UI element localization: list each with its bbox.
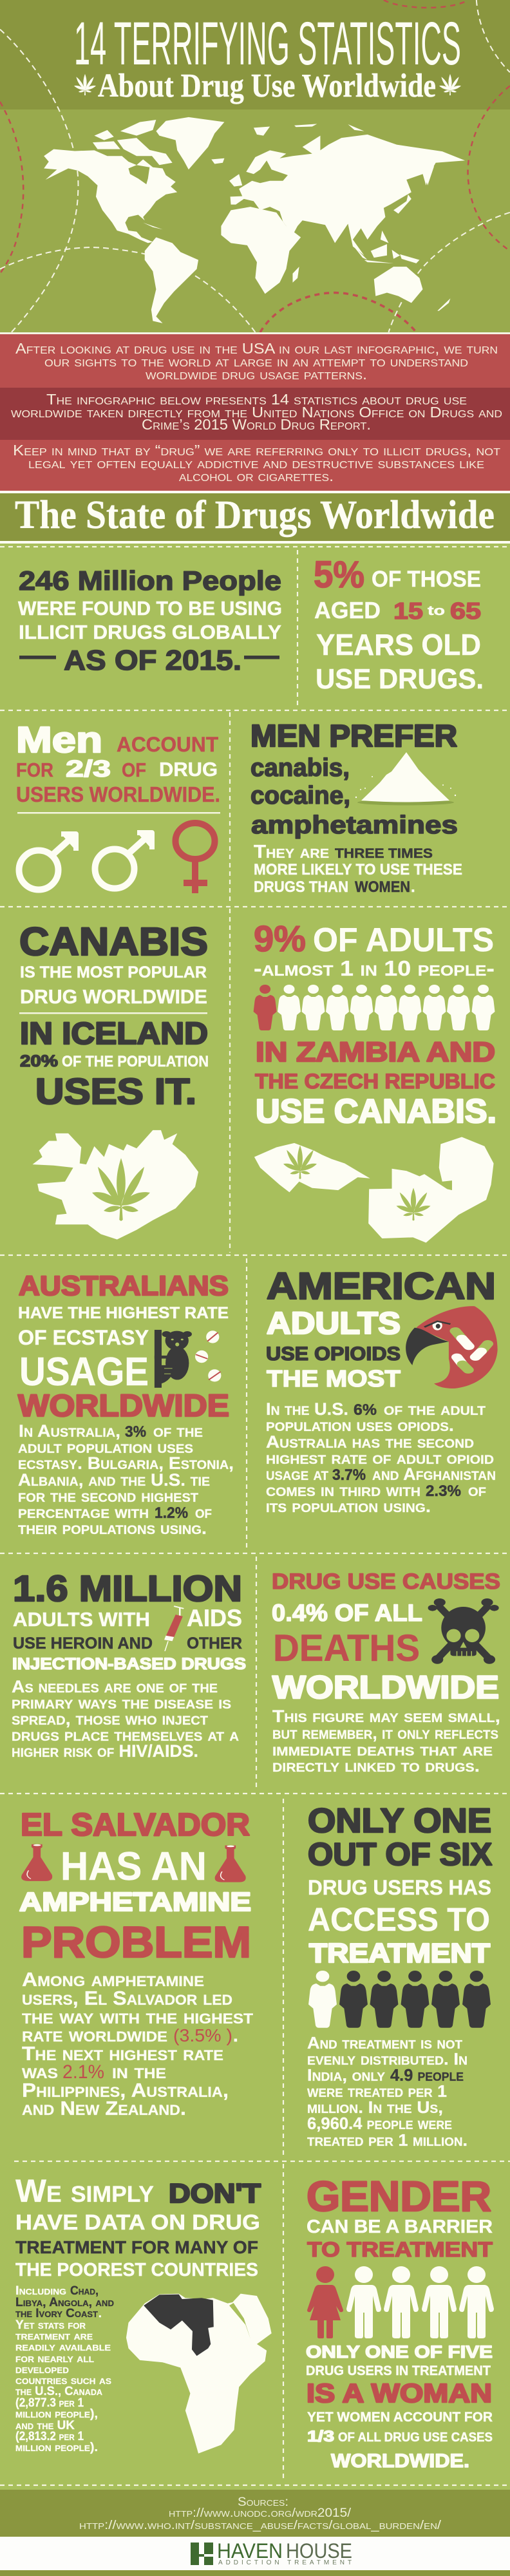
panel: 9 percent in Zambia and Czech Republic: THE CZECH REPUBLIC [255,1070,495,1093]
map: Zambia with leaf [368,1137,494,1243]
panel: 9 percent in Zambia and Czech Republic: USE CANABIS. [256,1093,496,1130]
panel: canabis in Iceland: OF THE POPULATION [62,1053,209,1070]
text: U.S. opioid detail: of [468,1481,486,1500]
panel: only one out of six has access to treatment: TREATMENT [309,1938,490,1968]
panel: gender can be a barrier: CAN BE A BARRIER [307,2217,493,2237]
panel: men prefer canabis, cocaine, amphetamines [250,719,462,896]
text: needles and HIV/AIDS risk [12,1677,239,1761]
text: amphetamine rates: and New Zealand. [22,2097,186,2119]
icon: koala on a pole with pills [155,1330,221,1388]
text: treatment distribution: 4.9 people [390,2065,464,2085]
panel: drug use causes 0.4 percent of deaths: DRUG USE CAUSES [272,1569,500,1594]
icon: female symbol [175,823,215,893]
intro paragraph 3: alcohol or cigarettes. [179,468,334,484]
text: U.S. opioid detail: comes in third with [266,1481,420,1500]
panel: American adults use opioids: ADULTS [267,1307,401,1341]
panel: 5 percent of those aged 15 to 65: AGED [314,597,381,623]
text: needles and HIV/AIDS risk: As needles are one of the [12,1677,218,1696]
panel: gender can be a barrier: DRUG USERS IN TREATMENT [306,2363,491,2378]
panel: American adults use opioids: AMERICAN [267,1265,496,1307]
text: treatment distribution: India, only [307,2065,385,2085]
panel: 5 percent of those aged 15 to 65: 15 [393,598,423,624]
header: title band and world map [0,0,510,332]
icon: skull and crossbones [428,1598,499,1664]
panel: 9 percent in Zambia and Czech Republic [254,918,496,1243]
panel: American adults use opioids: THE MOST [267,1365,401,1392]
text: figure may seem small: immediate deaths that are [272,1740,493,1759]
panel: no data on treatment in poorest countries [15,2173,272,2454]
text: countries list: treatment are [15,2329,93,2343]
panel: only one out of six has access to treatment [307,1802,492,2150]
panel: 246 million people: AS OF 2015. [64,645,241,676]
text: countries list: the U.S., Canada [15,2385,103,2398]
panel: no data on treatment in poorest countries: THE POOREST COUNTRIES [15,2260,258,2280]
panel: gender can be a barrier: GENDER [307,2172,491,2220]
panel: men prefer canabis, cocaine, amphetamines: . [411,878,415,896]
panel: men prefer canabis, cocaine, amphetamines: amphetamines [251,811,458,839]
panel: 1.6 million adults with AIDS: ADULTS WITH [13,1608,150,1631]
panel: canabis in Iceland: USES IT. [35,1071,196,1112]
panel: men prefer canabis, cocaine, amphetamines: They are [254,842,329,862]
text: Australia ecstasy detail: 3% [125,1423,146,1441]
icon: eagle head with pills [406,1306,498,1388]
text: U.S. opioid detail: Australia has the second [266,1432,474,1452]
panel: 246 million people: WERE FOUND TO BE USING [18,597,282,620]
intro paragraph 2: Crime’s 2015 World Drug Report. [142,416,371,433]
intro text panel [0,332,510,491]
text: treatment distribution [307,2033,468,2150]
icon: flasks [21,1844,246,1882]
text: amphetamine rates: users, El Salvador led [22,1987,232,2009]
panel: El Salvador amphetamine problem: EL SALVADOR [21,1808,250,1842]
panel: no data on treatment in poorest countries: HAVE DATA ON DRUG [15,2210,260,2234]
panel: drug use causes 0.4 percent of deaths [272,1569,500,1776]
panel: American adults use opioids: USE OPIOIDS [266,1343,401,1365]
panel: American adults use opioids [266,1265,498,1516]
panel: gender can be a barrier: WORLDWIDE. [331,2450,469,2472]
text: Australia ecstasy detail: ecstasy. Bulgaria, Estonia, [18,1454,234,1473]
text: Australia ecstasy detail: In Australia, [19,1421,120,1441]
panel: 246 million people: 246 Million People [19,565,281,596]
footer: Haven House logo: ADDICTION TREATMENT [218,2559,352,2566]
panel: no data on treatment in poorest countries: DON'T [169,2178,261,2208]
text: U.S. opioid detail: and Afghanistan [372,1464,496,1484]
map: Czech Republic with leaf [254,1143,370,1192]
panel: Australians ecstasy usage: OF ECSTASY [18,1326,149,1349]
panel: drug use causes 0.4 percent of deaths: WORLDWIDE [272,1669,499,1705]
text: amphetamine rates: Among amphetamine [22,1968,204,1991]
panel: men prefer canabis, cocaine, amphetamines: cocaine, [250,782,350,810]
text: countries list: (2,813.2 per 1 [15,2430,84,2443]
panel: 1.6 million adults with AIDS [12,1568,246,1761]
text: figure may seem small: This figure may seem small, [272,1707,500,1726]
panel: Australians ecstasy usage: USAGE [19,1350,149,1394]
text: treatment distribution: million. In the Us, [307,2098,443,2117]
text: countries list: Libya, Angola, and [15,2296,114,2309]
text: needles and HIV/AIDS risk: higher risk of HIV/AIDS. [12,1741,198,1761]
text: U.S. opioid detail: of the adult [384,1399,486,1419]
panel: El Salvador amphetamine problem: PROBLEM [21,1918,251,1967]
panel: gender can be a barrier: OF ALL DRUG USE CASES [338,2430,493,2445]
panel: men prefer canabis, cocaine, amphetamines: canabis, [250,754,350,782]
panel: men account for 2/3 of drug users: ACCOUNT [117,733,218,756]
panel: 5 percent of those aged 15 to 65: OF THOSE [372,567,481,592]
text: Australia ecstasy detail: of the [153,1421,203,1441]
panel: gender can be a barrier [306,2172,494,2472]
panel: 1.6 million adults with AIDS: AIDS [187,1605,242,1631]
map: Iceland with leaf [32,1130,198,1240]
icon: pills [195,1331,221,1382]
intro paragraph 1 [15,340,498,383]
sources band: http://www.who.int/substance_abuse/facts/global_burden/en/ [79,2519,442,2532]
logo mark [191,2543,213,2565]
text: U.S. opioid detail: 3.7% [332,1466,366,1484]
panel: men account for 2/3 of drug users: USERS WORLDWIDE. [16,782,220,806]
intro paragraph 2: worldwide taken directly from the United Nations Office on Drugs and [11,404,502,421]
text: U.S. opioid detail: 2.3% [426,1482,461,1500]
panel: 5 percent of those aged 15 to 65: 65 [450,598,481,624]
text: U.S. opioid detail: highest rate of adult opioid [266,1448,494,1468]
text: amphetamine rates: was [22,2060,58,2083]
panel: Australians ecstasy usage: WORLDWIDE [18,1389,229,1423]
panel: only one out of six has access to treatment: ONLY ONE [308,1802,491,1840]
text: countries list: and the UK [15,2419,75,2432]
panel: 5 percent of those aged 15 to 65 [314,554,484,695]
panel: men prefer canabis, cocaine, amphetamines: MORE LIKELY TO USE THESE [254,861,462,878]
text: countries list: Yet stats for [15,2318,86,2332]
panel: gender can be a barrier: IS A WOMAN [307,2378,492,2408]
text: countries list: Including [15,2284,66,2298]
text: amphetamine rates: the way with the highest [22,2005,254,2028]
icon: syringe [164,1606,184,1651]
text: countries list: readily available [15,2340,111,2354]
text: Australia ecstasy detail: Albania, and the U.S. tie [18,1470,210,1490]
panel: no data on treatment in poorest countries: TREATMENT FOR MANY OF [15,2237,258,2257]
panel: no data on treatment in poorest countries: We simply [15,2173,154,2209]
panel: only one out of six has access to treatment: OUT OF SIX [308,1837,492,1872]
panel: canabis in Iceland: 20% [20,1052,58,1070]
panel: 5 percent of those aged 15 to 65: 5% [314,554,364,596]
text: treatment distribution: treated per 1 million. [307,2130,468,2150]
panel: men prefer canabis, cocaine, amphetamines: THREE TIMES [335,846,433,861]
panel: only one out of six has access to treatment: DRUG USERS HAS [308,1876,491,1899]
icon row: 1 in 10 people [254,985,495,1030]
panel: men prefer canabis, cocaine, amphetamines: DRUGS THAN [254,878,348,896]
intro paragraph 1: worldwide drug usage patterns. [146,366,367,383]
text: Australia ecstasy detail: their populations using. [18,1519,207,1538]
panel: 9 percent in Zambia and Czech Republic: -almost 1 in 10 people- [254,956,495,980]
panel: 9 percent in Zambia and Czech Republic: IN ZAMBIA AND [256,1037,495,1068]
text: needles and HIV/AIDS risk: primary ways the disease is [12,1693,231,1712]
text: amphetamine rates [22,1968,254,2119]
text: countries list: . [99,2307,102,2320]
intro paragraph 3 [13,442,500,484]
text: amphetamine rates: . [233,2025,238,2045]
panel: El Salvador amphetamine problem: HAS AN [61,1844,207,1889]
text: Australia ecstasy detail: of [195,1502,212,1522]
panel: drug use causes 0.4 percent of deaths: 0.4% OF ALL [272,1600,422,1626]
panel: 5 percent of those aged 15 to 65: USE DRUGS. [316,663,484,695]
panel: men prefer canabis, cocaine, amphetamines: WOMEN [355,878,410,896]
text: countries list: million people), [15,2407,98,2421]
icon: male symbol [95,833,152,889]
panel: canabis in Iceland: IN ICELAND [20,1017,208,1051]
text: amphetamine rates: in the [112,2060,166,2083]
intro paragraph 1: After looking at drug use in the USA in our last infographic, we turn [15,340,498,357]
text: amphetamine rates: Philippines, Australia, [22,2079,229,2101]
text: needles and HIV/AIDS risk: drugs place themselves at a [12,1725,239,1745]
text: U.S. opioid detail: In the U.S. [266,1399,348,1419]
text: countries list: (2,877.3 per 1 [15,2396,84,2410]
panel: 1.6 million adults with AIDS: INJECTION-BASED DRUGS [12,1655,246,1673]
text: Australia ecstasy detail [18,1421,234,1538]
text: Australia ecstasy detail: percentage with [18,1502,149,1522]
panel: 5 percent of those aged 15 to 65: to [428,604,445,618]
text: U.S. opioid detail: usage at [266,1464,328,1484]
intro paragraph 2: The infographic below presents 14 statistics about drug use [46,391,467,408]
text: countries list: developed [15,2363,69,2376]
intro paragraph 1: our sights to the world at large in an attempt to understand [44,353,468,370]
text: countries list: Chad, [70,2284,99,2298]
text: countries list: for nearly all [15,2352,94,2365]
panel: 1.6 million adults with AIDS: OTHER [187,1634,242,1653]
text: figure may seem small: but remember, it only reflects [272,1723,498,1743]
panel: gender can be a barrier: ONLY ONE OF FIVE [306,2342,493,2362]
subtitle with leaf icons: About Drug Use Worldwide [98,68,436,104]
footer: Haven House logo [0,2537,510,2576]
panel: gender can be a barrier: TO TREATMENT [307,2238,493,2261]
text: countries list: the Ivory Coast [15,2307,98,2320]
sources band [0,2490,510,2537]
footer: Haven House logo: HOUSE [286,2539,352,2562]
panel: canabis in Iceland: CANABIS [19,920,208,963]
text: treatment distribution: 6,960.4 people were [307,2114,452,2133]
text: amphetamine rates: rate worldwide [22,2023,167,2046]
text: amphetamine rates: (3.5% ) [173,2025,232,2045]
panel: 1.6 million adults with AIDS: 1.6 MILLION [13,1568,242,1609]
panel: Australians ecstasy usage: AUSTRALIANS [19,1271,229,1302]
panel: 9 percent in Zambia and Czech Republic: 9% [254,918,306,960]
panel: only one out of six has access to treatment: ACCESS TO [308,1901,490,1938]
panel: drug use causes 0.4 percent of deaths: DEATHS [273,1627,420,1669]
panel: gender can be a barrier: YET WOMEN ACCOUNT FOR [307,2410,493,2425]
text: Australia ecstasy detail: for the second highest [18,1486,198,1506]
text: figure may seem small: directly linked to drugs. [272,1756,480,1776]
icon row: one woman, four men [307,2266,494,2338]
world map [44,117,465,323]
panel: 9 percent in Zambia and Czech Republic: OF ADULTS [313,922,494,959]
panel: men account for 2/3 of drug users [16,719,220,893]
text: amphetamine rates: The next highest rate [22,2042,223,2065]
panel: 5 percent of those aged 15 to 65: YEARS OLD [316,628,481,661]
icon: powder pile [355,752,456,805]
text: needles and HIV/AIDS risk: spread, those who inject [12,1709,208,1728]
text: U.S. opioid detail: its population using. [266,1497,431,1516]
sources band: Sources: [238,2496,288,2509]
text: countries list: countries such as [15,2374,111,2387]
panel: 246 million people: ILLICIT DRUGS GLOBALLY [19,621,281,643]
text: countries list [15,2284,114,2454]
icon: male symbol [19,834,76,890]
panel: men prefer canabis, cocaine, amphetamines: MEN PREFER [250,719,457,753]
text: amphetamine rates: 2.1% [62,2061,104,2083]
panel: 246 million people [18,565,282,676]
text: figure may seem small [272,1707,500,1776]
text: Australia ecstasy detail: 1.2% [155,1504,188,1522]
intro paragraph 2 [11,391,502,433]
dashed route curves [0,0,510,332]
panel: canabis in Iceland: DRUG WORLDWIDE [20,985,207,1008]
intro paragraph 3: Keep in mind that by “drug” we are referring only to illicit drugs, not [13,442,500,459]
intro paragraph 3: legal yet often equally addictive and destructive substances like [28,455,484,471]
panel: Australians ecstasy usage [18,1271,234,1538]
panel: men account for 2/3 of drug users: Men [16,719,102,761]
text: treatment distribution: And treatment is not [307,2033,462,2052]
text: U.S. opioid detail: population uses opiods. [266,1416,454,1435]
sources band: http://www.unodc.org/wdr2015/ [169,2506,352,2520]
panel: gender can be a barrier: 1/3 [307,2428,334,2445]
panel: 1.6 million adults with AIDS: USE HEROIN AND [13,1634,153,1653]
panel: men account for 2/3 of drug users: DRUG [159,758,218,781]
text: U.S. opioid detail [266,1399,496,1516]
text: treatment distribution: were treated per 1 [307,2081,447,2101]
panel: Australians ecstasy usage: HAVE THE HIGHEST RATE [18,1304,229,1322]
panel: men account for 2/3 of drug users: FOR [16,759,53,781]
text: U.S. opioid detail: 6% [354,1401,377,1419]
panel: El Salvador amphetamine problem [19,1808,254,2119]
panel: El Salvador amphetamine problem: AMPHETAMINE [19,1887,251,1917]
icon row: 1 of 6 people [308,1971,491,2028]
text: countries list: million people). [15,2441,98,2454]
footer: Haven House logo: HAVEN [217,2539,283,2562]
panel: men account for 2/3 of drug users: 2/3 [66,755,111,782]
panel: canabis in Iceland: IS THE MOST POPULAR [20,963,207,981]
panel: men account for 2/3 of drug users: OF [122,759,146,781]
text: Australia ecstasy detail: adult population uses [18,1437,193,1457]
map: Africa with highlighted countries [126,2294,272,2454]
panel: canabis in Iceland [19,920,209,1240]
text: treatment distribution: evenly distributed. In [307,2049,468,2069]
